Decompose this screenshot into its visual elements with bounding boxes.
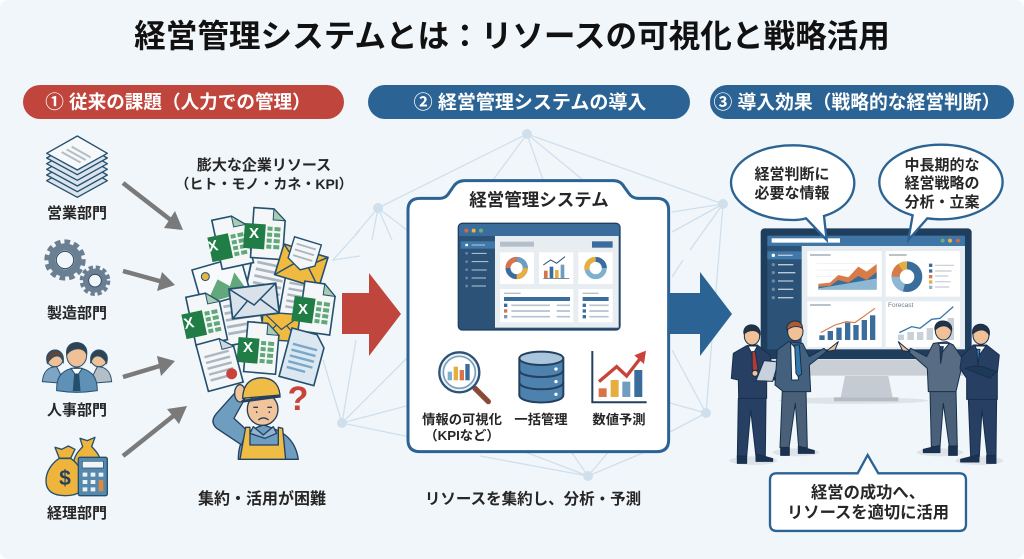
feature labels bbox=[422, 411, 646, 443]
callout: success bbox=[770, 455, 966, 531]
header pill 3 bbox=[710, 85, 1014, 119]
feature labels: （KPIなど） bbox=[424, 428, 500, 443]
resources heading bbox=[175, 156, 353, 192]
speech bubble: management info bbox=[731, 145, 854, 240]
icon: paper stack bbox=[47, 136, 107, 197]
panel heading: 経営管理システム bbox=[469, 190, 609, 210]
icon: blue document bbox=[279, 328, 327, 386]
speech bubble: strategy: 経営戦略の bbox=[904, 174, 980, 192]
forecast label: Forecast bbox=[888, 302, 913, 309]
panel frame bbox=[408, 181, 669, 452]
resources heading: 膨大な企業リソース bbox=[197, 156, 331, 174]
title: 経営管理システムとは：リソースの可視化と戦略活用 bbox=[134, 18, 890, 54]
icon: forecast chart bbox=[592, 351, 647, 402]
icon: database bbox=[519, 352, 563, 402]
arrow: red bbox=[342, 273, 401, 356]
icon: photo bbox=[192, 256, 251, 307]
monitor bbox=[761, 228, 972, 404]
icon: grey envelope bbox=[229, 283, 279, 319]
document pile: X bbox=[249, 225, 259, 242]
speech bubble: strategy bbox=[879, 145, 1003, 240]
person 2 bbox=[775, 321, 838, 455]
document pile: X bbox=[298, 301, 308, 318]
arrow: blue bbox=[660, 272, 732, 356]
network background bbox=[323, 129, 728, 481]
arrows: departments to resources bbox=[123, 183, 187, 456]
header pill 1 bbox=[23, 85, 344, 119]
feature labels: 一括管理 bbox=[514, 411, 568, 427]
monitor chin and stand bbox=[761, 359, 972, 404]
callout: success: 経営の成功へ、 bbox=[811, 483, 925, 502]
document pile: X bbox=[243, 339, 253, 356]
header pill 3: ③ 導入効果（戦略的な経営判断） bbox=[714, 92, 1000, 112]
speech bubble: strategy: 分析・立案 bbox=[904, 193, 980, 211]
document pile bbox=[178, 207, 337, 391]
icon: money bags and calculator: $ bbox=[59, 467, 71, 490]
label: accounting: 経理部門 bbox=[47, 505, 107, 522]
person 4 bbox=[960, 324, 999, 463]
caption: aggregation: リソースを集約し、分析・予測 bbox=[425, 489, 641, 508]
question mark: ? bbox=[288, 380, 308, 418]
person 3 bbox=[898, 321, 963, 455]
speech bubble: management info: 必要な情報 bbox=[754, 184, 830, 202]
icon: excel files: X bbox=[206, 237, 220, 256]
shadows bbox=[729, 448, 1003, 465]
feature labels: 数値予測 bbox=[592, 411, 646, 427]
dashboard bbox=[458, 223, 620, 330]
label: manufacturing: 製造部門 bbox=[47, 305, 107, 322]
feature labels: 情報の可視化 bbox=[422, 411, 502, 427]
icon: magnifier bbox=[439, 352, 488, 402]
icon: worried worker bbox=[213, 378, 298, 459]
icon: yellow envelope bbox=[275, 234, 331, 288]
callout: success: リソースを適切に活用 bbox=[787, 503, 949, 522]
icon: excel files bbox=[204, 214, 254, 271]
icon: gears bbox=[48, 243, 108, 293]
icon: money bags and calculator bbox=[46, 437, 107, 496]
icon: people bbox=[42, 342, 112, 392]
panel: management system bbox=[408, 181, 669, 452]
document pile: X bbox=[182, 314, 196, 333]
label: HR: 人事部門 bbox=[47, 401, 107, 419]
people bbox=[729, 321, 1003, 465]
speech bubble: strategy: 中長期的な bbox=[904, 156, 980, 174]
header pill 2: ② 経営管理システムの導入 bbox=[414, 90, 646, 114]
label: sales: 営業部門 bbox=[47, 204, 107, 222]
speech bubble: management info: 経営判断に bbox=[754, 165, 830, 183]
resources heading: （ヒト・モノ・カネ・KPI） bbox=[175, 176, 353, 192]
header pill 1: ① 従来の課題（人力での管理） bbox=[45, 92, 311, 112]
person 1 bbox=[731, 325, 778, 463]
icon: stamped document bbox=[196, 336, 243, 391]
caption: difficulty: 集約・活用が困難 bbox=[198, 489, 326, 508]
header pill 2 bbox=[368, 85, 690, 119]
background documents bbox=[244, 245, 295, 308]
